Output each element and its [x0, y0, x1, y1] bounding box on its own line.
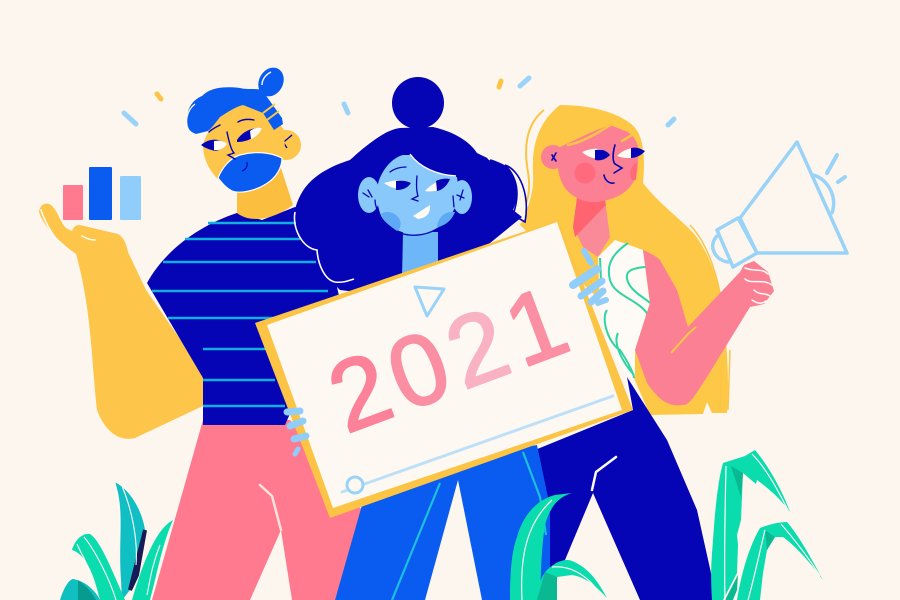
- board frame: [255, 220, 633, 518]
- plant: left foliage: [60, 482, 173, 600]
- his beard: [218, 153, 282, 192]
- her eyes and nose: [582, 149, 609, 158]
- her hair: [520, 105, 728, 415]
- person: left man: [39, 63, 362, 600]
- his arm and open hand: [39, 204, 205, 439]
- her hair and bun: [295, 127, 522, 300]
- hand: right grip on board: [573, 251, 606, 303]
- play triangle icon: [415, 287, 444, 316]
- her top: [598, 240, 650, 377]
- her eyes, nose and mouth: [384, 180, 411, 189]
- her ears: [358, 177, 380, 213]
- her trousers: [335, 445, 550, 600]
- board panel: [267, 222, 622, 508]
- her trousers: [530, 377, 717, 600]
- year text: 2021: [314, 262, 588, 455]
- his ear: [271, 130, 301, 160]
- her neck: [573, 198, 610, 257]
- megaphone: [713, 142, 847, 267]
- her arm and fist: [635, 250, 774, 405]
- her cheeks: [574, 162, 596, 184]
- his eyes, brows and nose: [201, 140, 224, 151]
- person: right woman: [520, 105, 774, 600]
- his neck: [237, 165, 293, 219]
- hand: left grip on board: [287, 411, 306, 454]
- his trousers: [152, 420, 362, 600]
- shirt stripes: [152, 223, 328, 406]
- her face: [377, 155, 458, 234]
- plant: centre foliage: [510, 493, 607, 600]
- his hair and bun: [253, 63, 289, 101]
- her hair outline: [505, 165, 526, 222]
- plant: right foliage: [711, 450, 823, 600]
- her neck: [402, 232, 438, 278]
- progress bar with slider knob: [342, 396, 613, 493]
- confetti dashes: [124, 78, 674, 125]
- his face: [203, 100, 285, 190]
- her cheeks: [381, 212, 401, 231]
- her face: [541, 145, 565, 169]
- sign board with 2021: [255, 220, 633, 518]
- person: centre woman: [294, 77, 550, 600]
- bar chart held in hand: [63, 167, 141, 220]
- his shirt: [147, 207, 340, 425]
